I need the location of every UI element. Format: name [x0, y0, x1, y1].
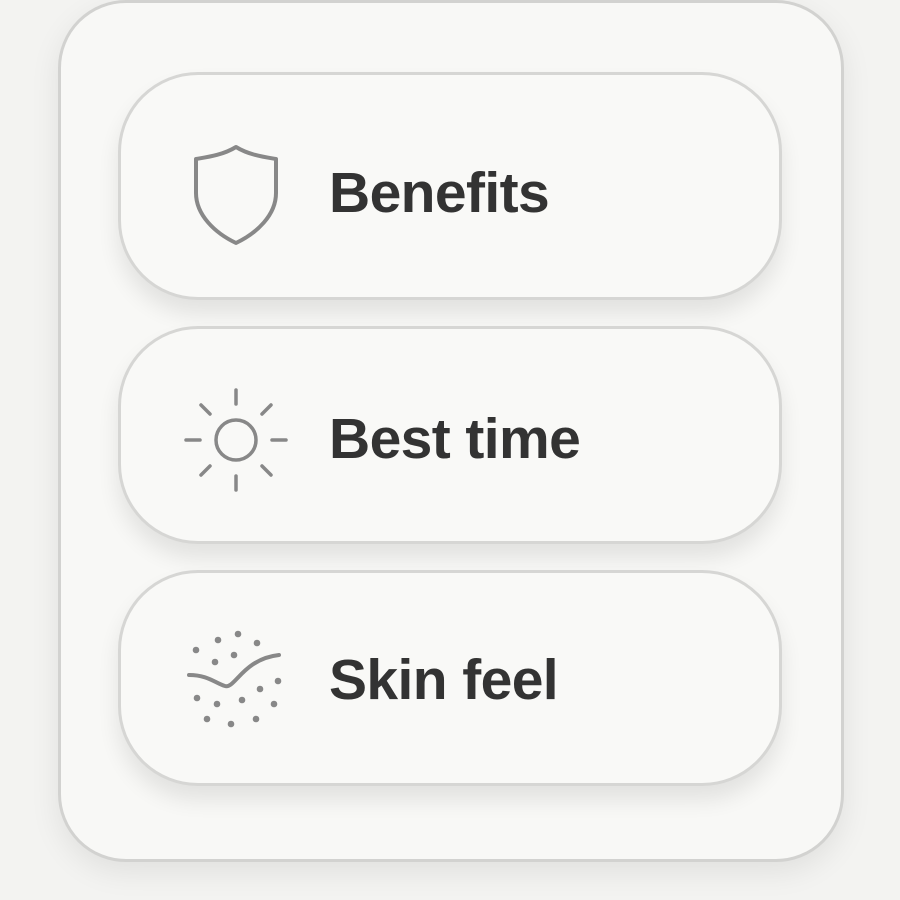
icon: shield: [194, 145, 278, 245]
card: skin feel: [118, 570, 782, 786]
label: Skin feel: Skin feel: [329, 648, 558, 712]
card: best time: [118, 326, 782, 544]
label: Best time: Best time: [329, 407, 580, 471]
label: Benefits: Benefits: [329, 161, 549, 225]
icon: sun: [184, 388, 288, 492]
card: benefits: [118, 72, 782, 300]
icon: skin texture: [187, 630, 282, 728]
